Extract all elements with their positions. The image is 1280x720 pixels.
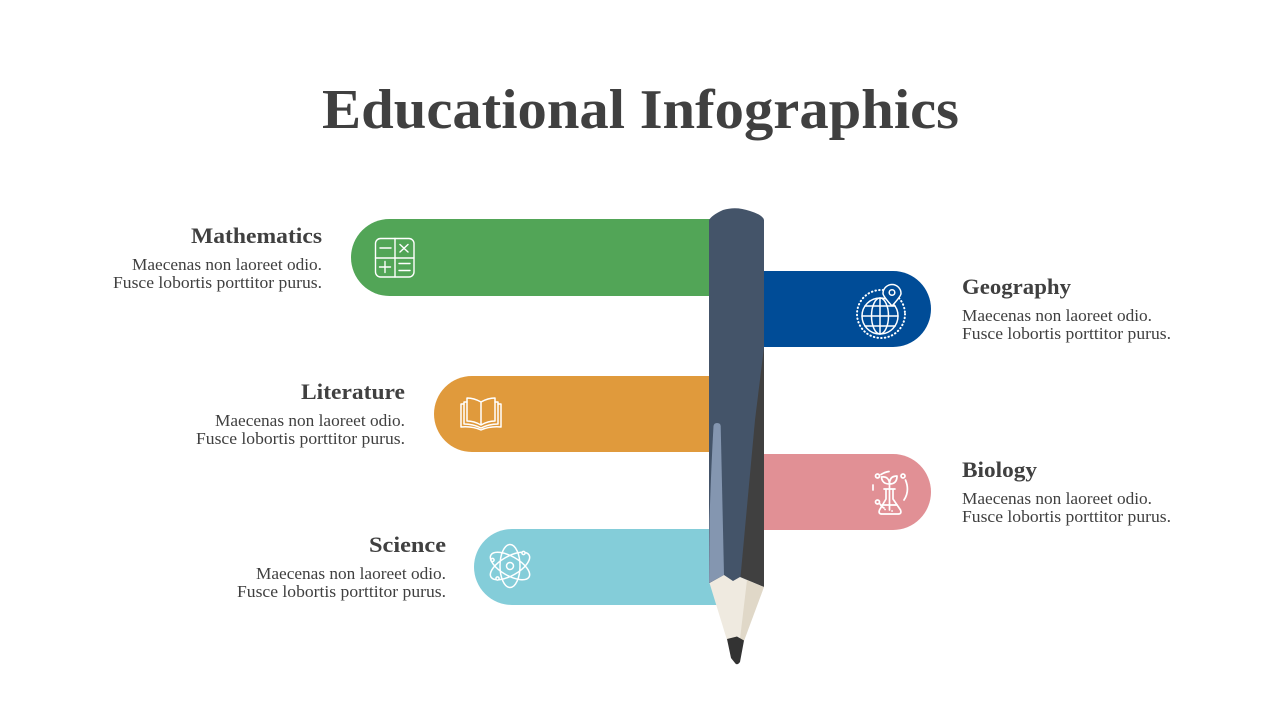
biology bar (750, 454, 931, 530)
icon: flask with sprout (873, 472, 907, 514)
literature text (196, 411, 405, 448)
pencil wood shade (740, 580, 764, 641)
panel: mathematics (113, 219, 720, 296)
literature text: Fusce lobortis porttitor purus. (196, 429, 405, 448)
pencil wood (710, 575, 764, 641)
science text (237, 564, 446, 601)
mathematics text (113, 255, 322, 292)
mathematics bar (351, 219, 720, 296)
panel: science (237, 529, 722, 605)
science text: Fusce lobortis porttitor purus. (237, 582, 446, 601)
panel: geography (750, 271, 1171, 347)
biology text: Fusce lobortis porttitor purus. (962, 507, 1171, 526)
geography text: Maecenas non laoreet odio. (962, 306, 1152, 325)
mathematics text: Fusce lobortis porttitor purus. (113, 273, 322, 292)
panel: biology (750, 454, 1171, 530)
pencil tip (727, 636, 744, 664)
biology text (962, 489, 1171, 526)
science text: Maecenas non laoreet odio. (256, 564, 446, 583)
geography bar (750, 271, 931, 347)
biology text: Maecenas non laoreet odio. (962, 489, 1152, 508)
panel: literature (196, 376, 720, 452)
geography text: Fusce lobortis porttitor purus. (962, 324, 1171, 343)
pencil (709, 208, 764, 664)
pencil shadow side (740, 347, 764, 587)
icon: calculator (376, 238, 414, 277)
geography heading: Geography (962, 274, 1071, 299)
geography text (962, 306, 1171, 343)
pencil body (709, 208, 764, 587)
science heading: Science (369, 532, 446, 557)
literature text: Maecenas non laoreet odio. (215, 411, 405, 430)
science bar (474, 529, 722, 605)
pencil highlight (709, 423, 724, 583)
literature bar (434, 376, 720, 452)
mathematics heading: Mathematics (191, 223, 322, 248)
biology heading: Biology (962, 457, 1037, 482)
icon: open book (461, 398, 501, 430)
literature heading: Literature (301, 379, 405, 404)
title: Educational Infographics (322, 79, 959, 141)
icon: atom (486, 544, 534, 588)
mathematics text: Maecenas non laoreet odio. (132, 255, 322, 274)
icon: globe with pin (857, 284, 905, 338)
